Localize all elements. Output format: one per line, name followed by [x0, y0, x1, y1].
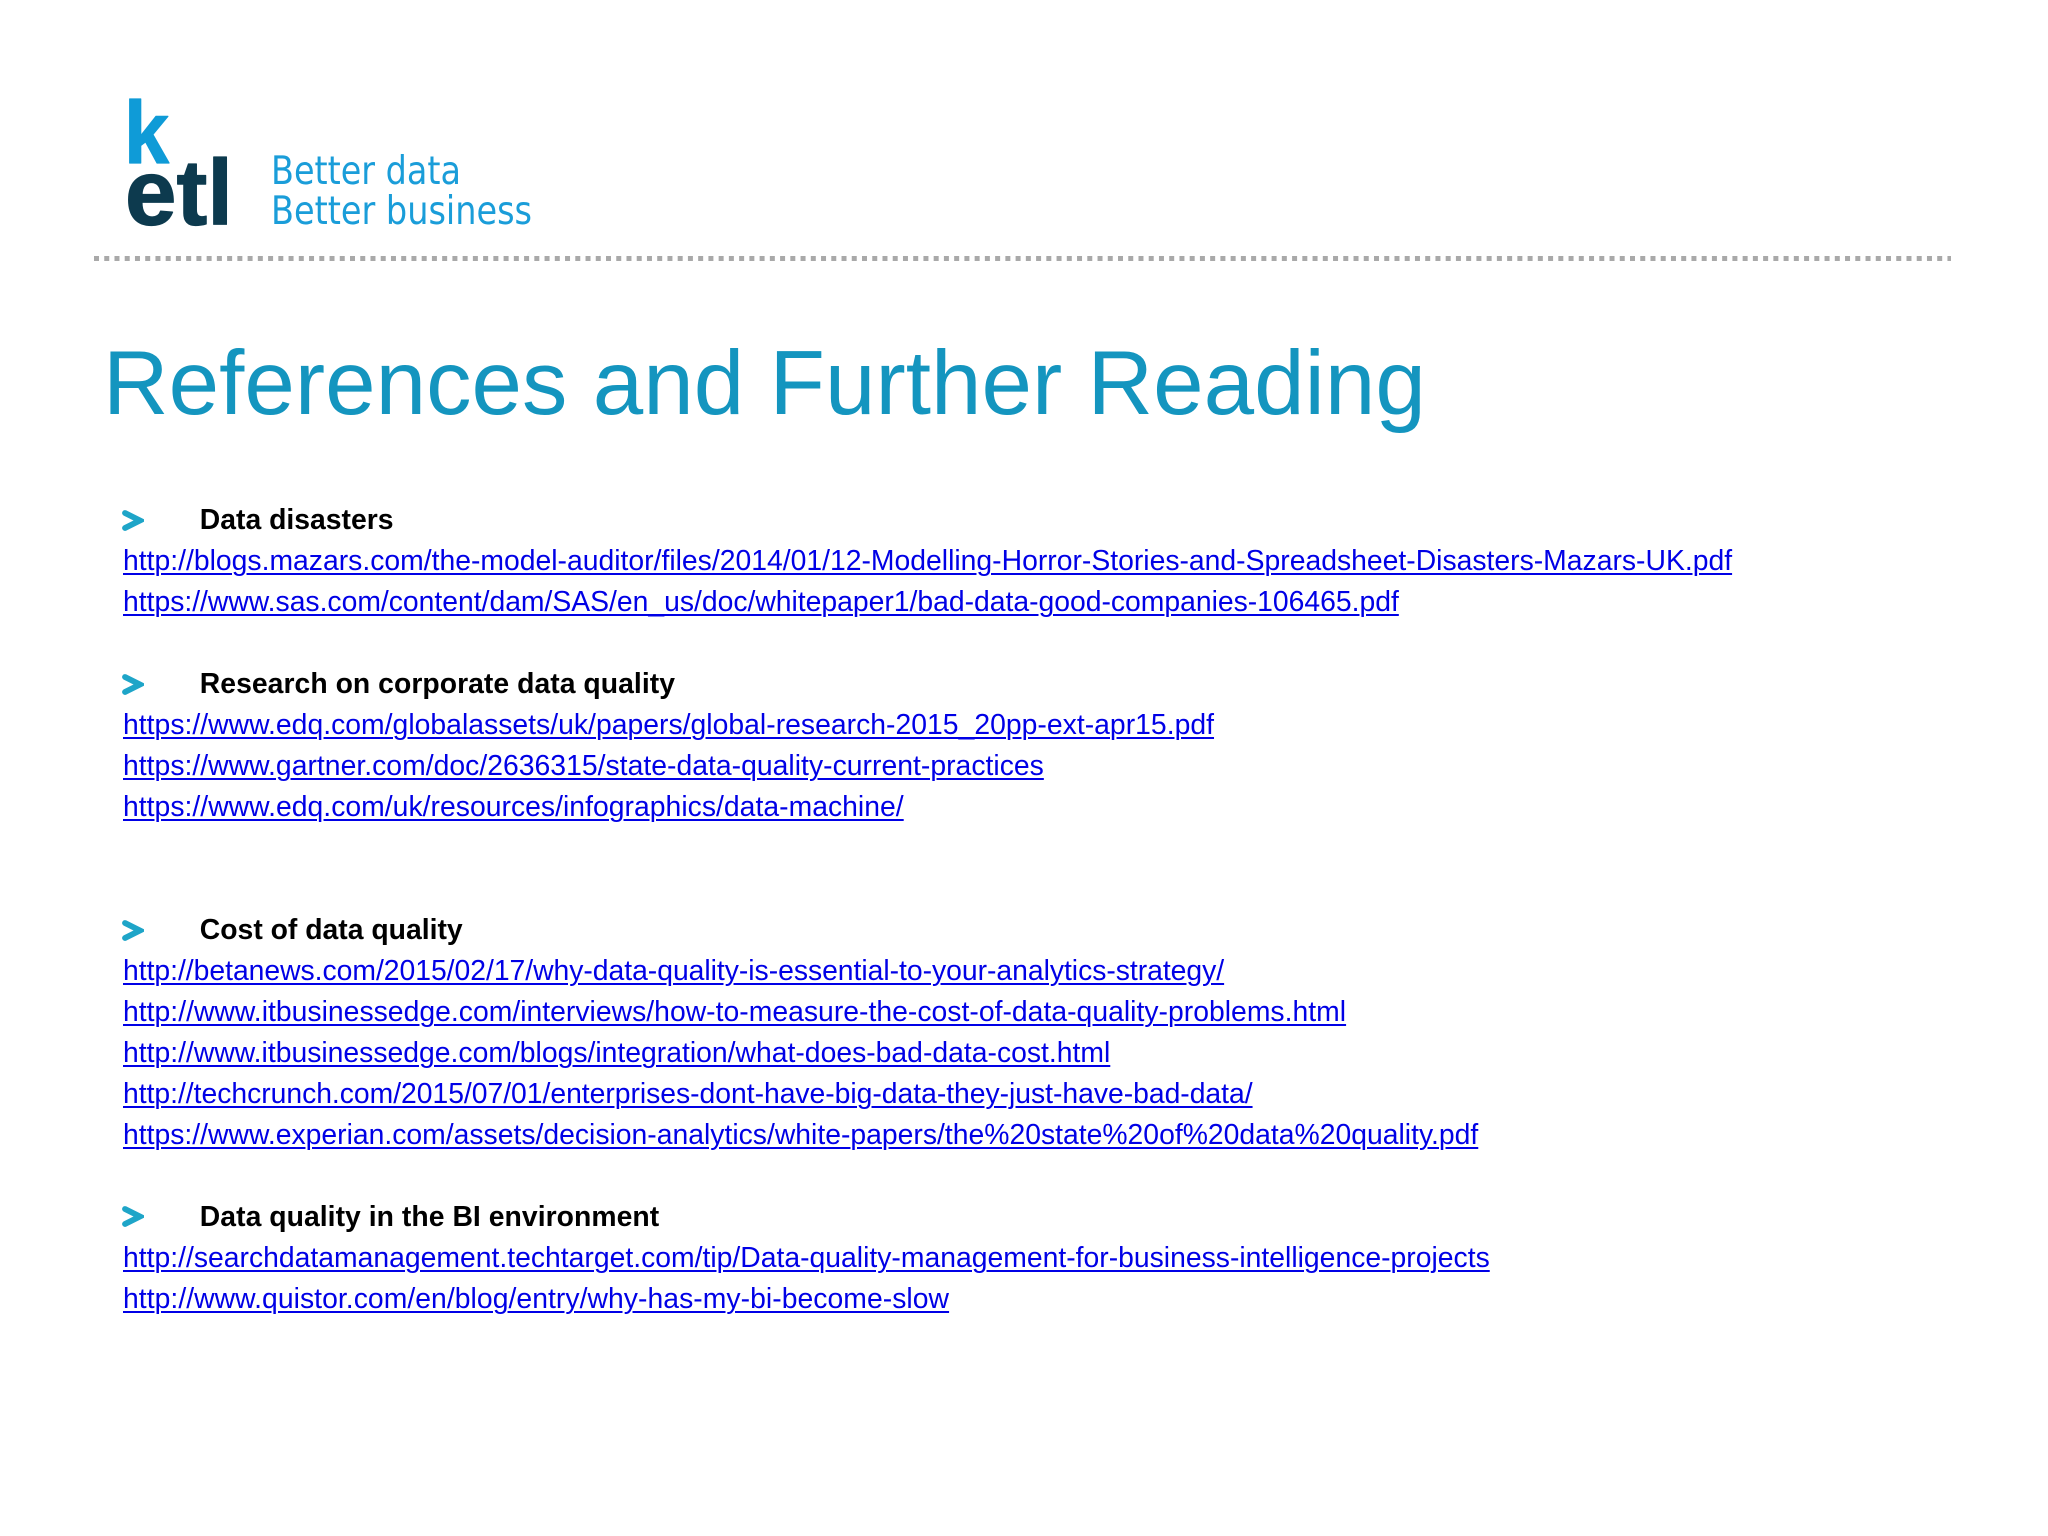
section: cost of data quality: http://techcrunch.com/2015/07/01/enterprises-dont-have-big-data-they-just-have-bad-data/ [123, 1078, 1253, 1110]
section: data quality in the BI environment [122, 1201, 1490, 1315]
heading: data quality in the BI environment: Data quality in the BI environment [200, 1201, 659, 1233]
title: References and Further Reading [103, 332, 1426, 434]
section: cost of data quality: https://www.experian.com/assets/decision-analytics/white-papers/the%20state%20of%20data%20quality.pdf [123, 1119, 1478, 1151]
section: research on corporate data quality: https://www.edq.com/globalassets/uk/papers/global-research-2015_20pp-ext-apr15.pdf [123, 709, 1214, 741]
section: data disasters: https://www.sas.com/content/dam/SAS/en_us/doc/whitepaper1/bad-data-good-companies-106465.pdf [123, 586, 1399, 618]
section: cost of data quality: http://www.itbusinessedge.com/blogs/integration/what-does-bad-data-cost.html [123, 1037, 1110, 1069]
section: research on corporate data quality: https://www.gartner.com/doc/2636315/state-data-quality-current-practices [123, 750, 1044, 782]
logo mark: k: k [124, 83, 170, 182]
section: data disasters [122, 504, 1732, 618]
section: cost of data quality: http://betanews.com/2015/02/17/why-data-quality-is-essential-to-your-analytics-strategy/ [123, 955, 1224, 987]
section: research on corporate data quality [122, 668, 1214, 823]
section: cost of data quality [122, 914, 1478, 1151]
heading: research on corporate data quality: Research on corporate data quality [200, 668, 675, 700]
section: data disasters: http://blogs.mazars.com/the-model-auditor/files/2014/01/12-Modelling-Horror-Stories-and-Spreadsheet-Disasters-Mazars-UK.pdf [123, 545, 1732, 577]
heading: cost of data quality: Cost of data quality [200, 914, 463, 946]
section: data quality in the BI environment: http://www.quistor.com/en/blog/entry/why-has-my-bi-become-slow [123, 1283, 949, 1315]
section: cost of data quality: http://www.itbusinessedge.com/interviews/how-to-measure-the-cost-of-data-quality-problems.html [123, 996, 1346, 1028]
section: research on corporate data quality: https://www.edq.com/uk/resources/infographics/data-machine/ [123, 791, 904, 823]
heading: data disasters: Data disasters [200, 504, 393, 536]
logo [124, 83, 532, 240]
tagline line 1: Better data [271, 149, 461, 194]
section: data quality in the BI environment: http://searchdatamanagement.techtarget.com/tip/Data-quality-management-for-business-intelligence-projects [123, 1242, 1490, 1274]
